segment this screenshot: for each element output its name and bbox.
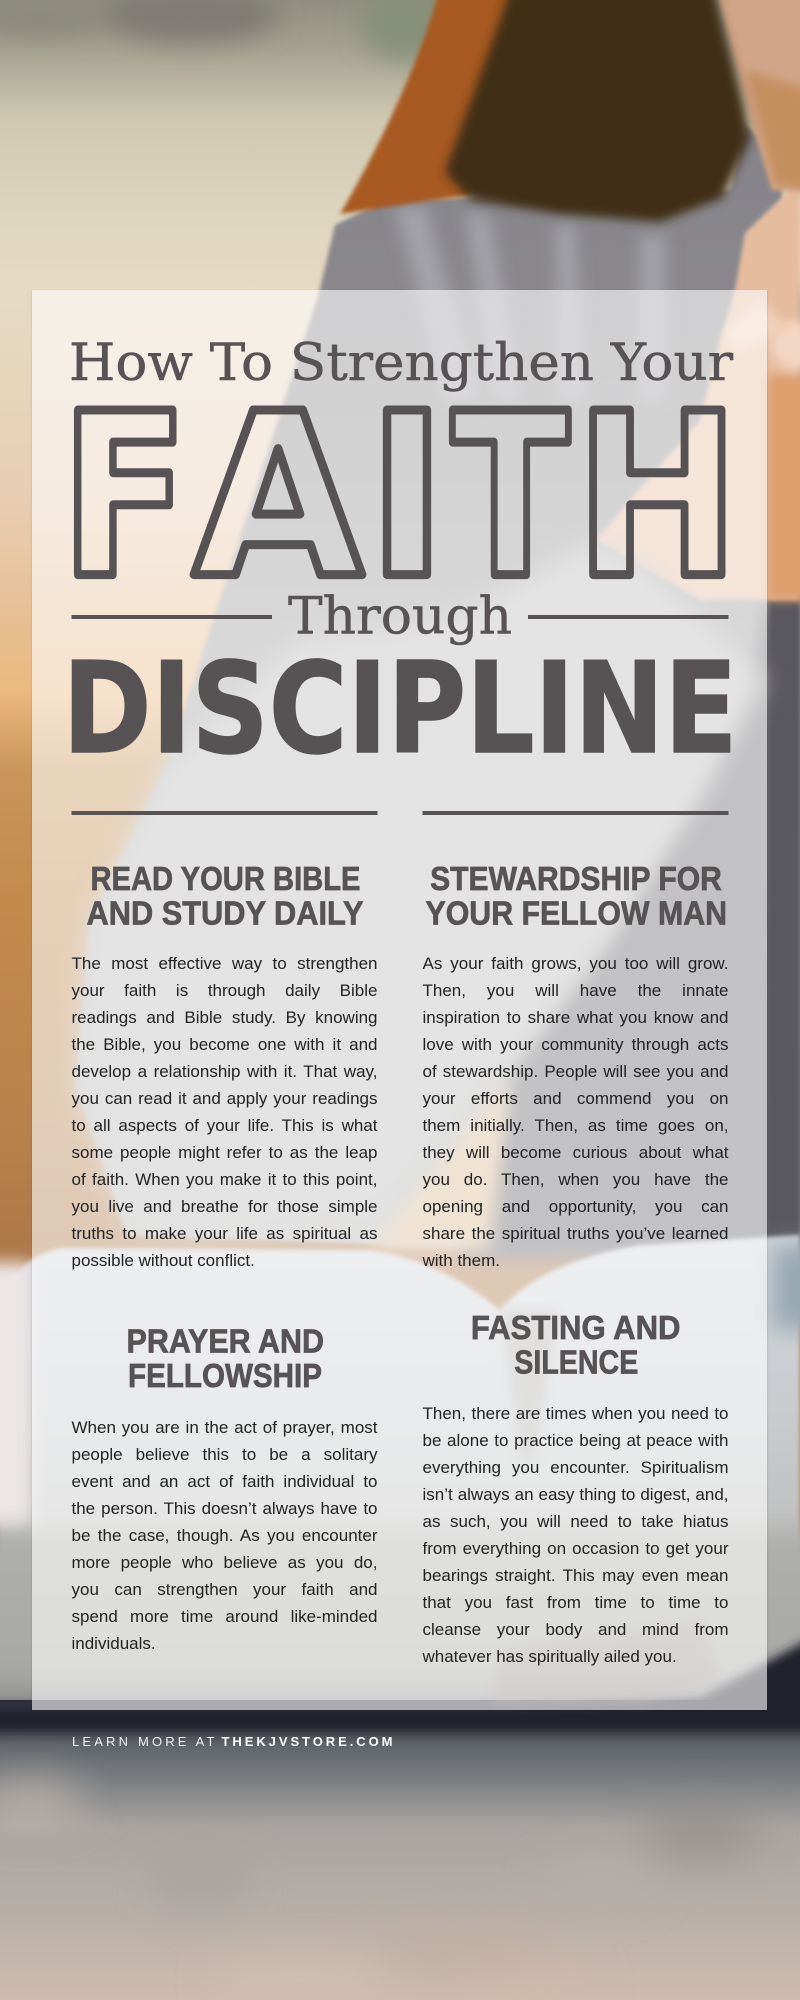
- body text: read your bible: [72, 954, 378, 1270]
- heading: stewardship for your fellow man: [425, 861, 726, 932]
- footer: learn more link: [72, 1734, 392, 1749]
- body text: fasting and silence: [422, 1404, 728, 1666]
- body text: fasting and silence: whatever has spiritually ailed you.: [422, 1647, 677, 1666]
- body text: fasting and silence: bearings straight. This may even mean: [422, 1566, 728, 1585]
- heading: prayer and fellowship: FELLOWSHIP: [128, 1358, 322, 1395]
- title block: [60, 334, 740, 815]
- body text: prayer and fellowship: you can strengthen your faith and: [72, 1580, 378, 1599]
- body text: fasting and silence: Then, there are times when you need to: [422, 1404, 728, 1423]
- heading: stewardship for your fellow man: STEWARDSHIP FOR: [430, 861, 721, 898]
- heading: prayer and fellowship: PRAYER AND: [126, 1324, 324, 1361]
- heading: read your bible and study daily: AND STUDY DAILY: [86, 895, 363, 932]
- heading: fasting and silence: FASTING AND: [470, 1310, 680, 1347]
- title word: FAITH in outline: I: [368, 365, 446, 628]
- body text: stewardship: them initially. Then, as time goes on,: [422, 1116, 728, 1135]
- body text: prayer and fellowship: more people who believe as you do,: [72, 1553, 378, 1572]
- body text: prayer and fellowship: people believe this to be a solitary: [72, 1445, 378, 1464]
- title line: How To Strengthen Your: How To Strengthen Your: [69, 334, 734, 393]
- body text: prayer and fellowship: [72, 1418, 378, 1653]
- panel: fasting and silence: [422, 1310, 728, 1666]
- translucent white content panel: [32, 290, 767, 1710]
- body text: prayer and fellowship: spend more time around like-minded: [72, 1607, 378, 1626]
- right margin: warm skin tone: [767, 375, 800, 600]
- body text: fasting and silence: isn’t always an easy thing to digest, and,: [422, 1485, 728, 1504]
- heading: fasting and silence: SILENCE: [514, 1345, 638, 1382]
- body text: stewardship: your efforts and commend you on: [422, 1089, 728, 1108]
- body text: stewardship: love with your community through acts: [422, 1035, 728, 1054]
- body text: fasting and silence: that you fast from time to time to: [422, 1593, 728, 1612]
- heading: read your bible and study daily: READ YOUR BIBLE: [90, 861, 360, 898]
- body text: stewardship: of stewardship. People will see you and: [422, 1062, 728, 1081]
- body text: fasting and silence: from everything on occasion to get your: [422, 1539, 728, 1558]
- footer: learn more link: THEKJVSTORE.COM: [221, 1734, 392, 1749]
- heading: read your bible and study daily: [86, 861, 364, 932]
- title word: FAITH in outline: A: [193, 365, 363, 628]
- body text: read your bible: some people might refer to as the leap: [72, 1143, 378, 1162]
- body text: prayer and fellowship: individuals.: [72, 1634, 156, 1653]
- body text: fasting and silence: as such, you will need to take hiatus: [422, 1512, 728, 1531]
- panel: prayer and fellowship: [72, 1324, 378, 1653]
- footer: learn more link: LEARN MORE AT: [72, 1734, 214, 1749]
- title word: FAITH in outline: F: [60, 365, 189, 628]
- body text: stewardship: [422, 954, 728, 1270]
- body text: stewardship: they will become curious about what: [422, 1143, 728, 1162]
- body text: read your bible: develop a relationship with it. That way,: [72, 1062, 378, 1081]
- body text: stewardship: As your faith grows, you too will grow.: [422, 954, 728, 973]
- heading: prayer and fellowship: [126, 1324, 324, 1395]
- body text: read your bible: readings and Bible study. By knowing: [72, 1008, 378, 1027]
- body text: read your bible: you live and breathe for those simple: [72, 1197, 378, 1216]
- body text: prayer and fellowship: When you are in the act of prayer, most: [72, 1418, 378, 1437]
- heading: stewardship for your fellow man: YOUR FELLOW MAN: [425, 895, 726, 932]
- body text: read your bible: truths to make your life as spiritual as: [72, 1224, 378, 1243]
- body text: read your bible: to all aspects of your life. This is what: [72, 1116, 378, 1135]
- body text: prayer and fellowship: be the case, though. As you encounter: [72, 1526, 378, 1545]
- panel: stewardship: [422, 861, 728, 1270]
- body text: read your bible: possible without conflict.: [72, 1251, 255, 1270]
- body text: stewardship: share the spiritual truths you’ve learned: [422, 1224, 728, 1243]
- body text: stewardship: Then, you will have the innate: [422, 981, 728, 1000]
- body text: fasting and silence: everything you encounter. Spiritualism: [422, 1458, 728, 1477]
- body text: prayer and fellowship: event and an act of faith individual to: [72, 1472, 378, 1491]
- body text: stewardship: you do. Then, when you have the: [422, 1170, 728, 1189]
- panel: read your bible: [72, 861, 378, 1270]
- body text: prayer and fellowship: the person. This doesn’t always have to: [72, 1499, 378, 1518]
- title word: FAITH in outline: [60, 365, 740, 629]
- body text: fasting and silence: cleanse your body and mind from: [422, 1620, 728, 1639]
- body text: stewardship: opening and opportunity, you can: [422, 1197, 728, 1216]
- body text: stewardship: with them.: [422, 1251, 500, 1270]
- body text: read your bible: The most effective way to strengthen: [72, 954, 378, 973]
- body text: read your bible: of faith. When you make it to this point,: [72, 1170, 378, 1189]
- body text: stewardship: inspiration to share what you know and: [422, 1008, 728, 1027]
- body text: read your bible: your faith is through daily Bible: [72, 981, 378, 1000]
- title word: FAITH in outline: T: [452, 366, 569, 629]
- body text: read your bible: you can read it and apply your readings: [72, 1089, 378, 1108]
- body text: read your bible: the Bible, you become one with it and: [72, 1035, 378, 1054]
- heading: fasting and silence: [470, 1310, 680, 1382]
- body text: fasting and silence: be alone to practice being at peace with: [422, 1431, 728, 1450]
- title word: FAITH in outline: H: [575, 365, 740, 628]
- title word: Through: Through: [288, 588, 512, 647]
